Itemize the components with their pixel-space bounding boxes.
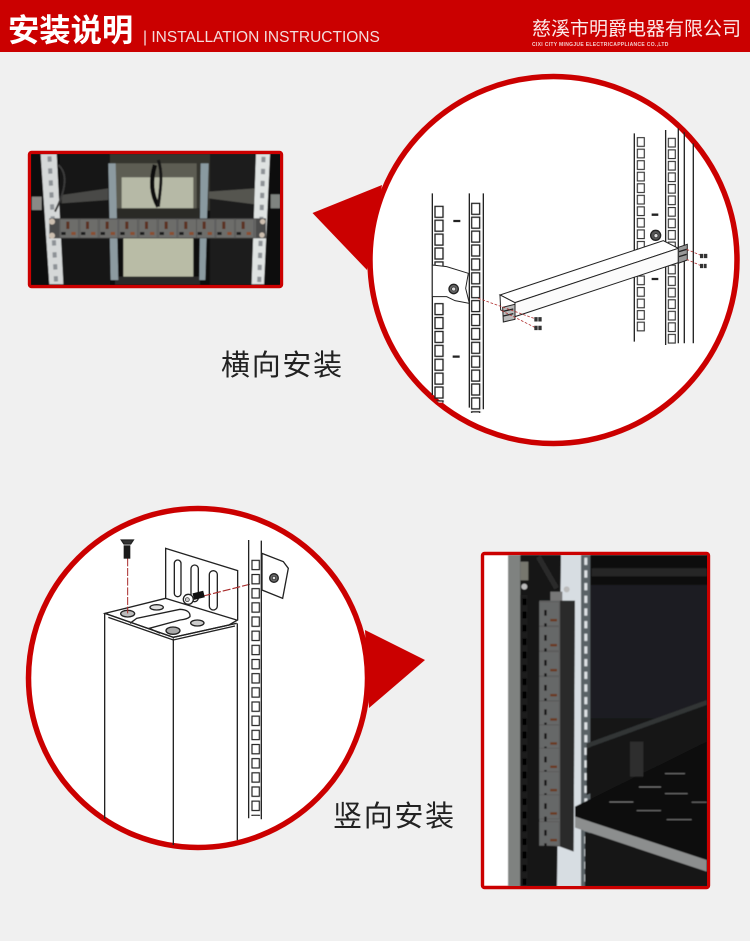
dashed guide lines and screws — [478, 249, 707, 328]
circle diagram: vertical installation — [28, 508, 368, 848]
shelf — [575, 742, 707, 860]
photo: vertical installation — [482, 554, 708, 888]
company name: 慈溪市明爵电器有限公司 — [532, 19, 741, 40]
PDU body — [105, 613, 237, 845]
screws and dashed guides — [121, 540, 273, 613]
pointer triangle: vertical — [365, 630, 425, 708]
circle diagram: horizontal installation — [370, 76, 737, 444]
cable and plug — [538, 557, 557, 588]
vertical rack rail — [249, 540, 288, 819]
left rack rail — [432, 193, 483, 413]
label: vertical installation: 竖向安装 — [333, 800, 456, 833]
label: horizontal installation: 横向安装 — [221, 349, 344, 382]
mounting bracket — [105, 548, 238, 640]
right rack rail — [634, 128, 693, 345]
pointer triangle: horizontal — [312, 185, 382, 270]
english subtitle: | INSTALLATION INSTRUCTIONS — [143, 29, 380, 46]
photo: horizontal installation — [30, 152, 282, 286]
title: 安装说明 — [8, 13, 133, 48]
vertical PDU — [560, 601, 575, 852]
PDU bar — [500, 241, 687, 322]
company english name: CIXI CITY MINGJUE ELECTRICAPPLIANCE CO.,LTD — [532, 42, 669, 48]
header band — [0, 0, 750, 52]
